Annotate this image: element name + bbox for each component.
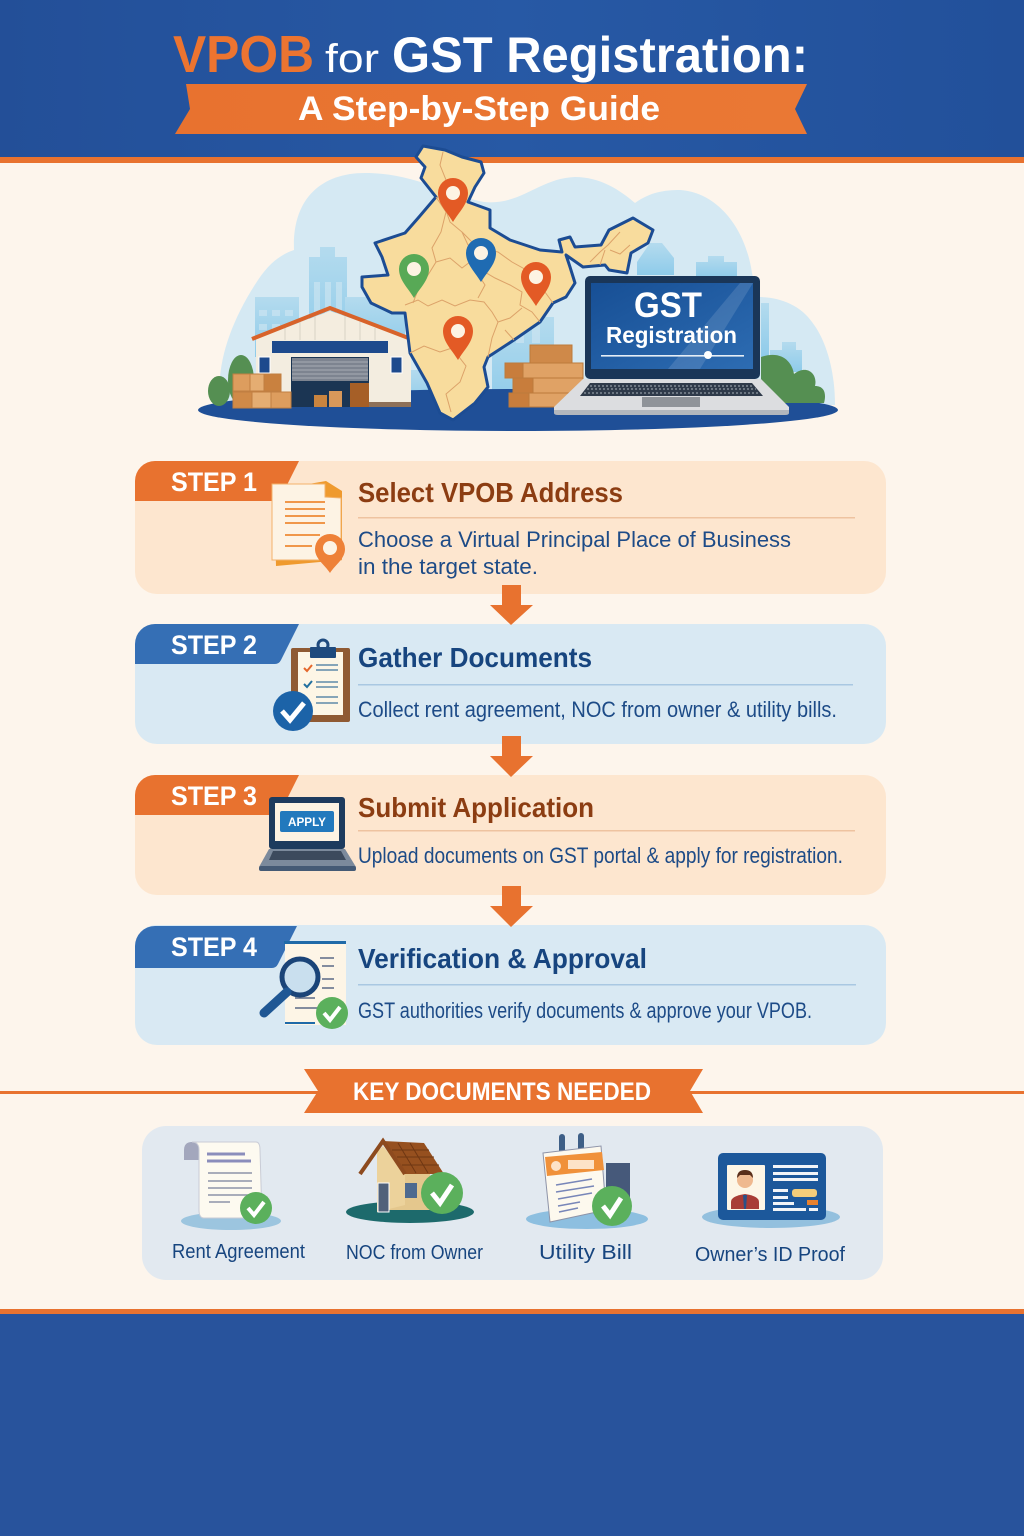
bushes — [208, 355, 825, 406]
step 1 card: Select VPOB Address — [358, 477, 623, 508]
step 2 card — [135, 624, 886, 744]
key documents banner: KEY DOCUMENTS NEEDED — [353, 1078, 651, 1106]
arrow: step 1 to 2 — [490, 585, 533, 625]
arrow: step 2 to 3 — [490, 736, 533, 777]
city skyline — [255, 243, 802, 407]
step 3 card: Upload documents on GST portal & apply for registration. — [358, 843, 843, 868]
title — [173, 26, 808, 84]
subtitle ribbon — [175, 84, 807, 134]
boxes left — [233, 374, 291, 408]
step 4 tab — [135, 926, 297, 968]
step 1 tab — [135, 461, 299, 501]
title: GST Registration: — [392, 27, 808, 83]
document: NOC from owner — [346, 1141, 483, 1264]
hero illustration — [198, 146, 838, 431]
step 1 description: in the target state. — [358, 554, 538, 579]
icon: laptop with apply button: APPLY — [288, 815, 326, 829]
India map — [362, 146, 653, 420]
step 4 tab: STEP 4 — [171, 932, 257, 962]
key documents banner — [304, 1069, 703, 1113]
title: for — [325, 37, 379, 81]
document: utility bill: Utility Bill — [539, 1242, 632, 1264]
step 3 card — [135, 775, 886, 895]
step 3 card: Submit Application — [358, 792, 594, 823]
step 4 card: Verification & Approval — [358, 943, 647, 974]
icon: clipboard with check — [273, 640, 350, 731]
cloud backdrop — [220, 173, 835, 405]
ground ellipse — [198, 389, 838, 431]
laptop — [554, 276, 789, 415]
boxes right — [505, 345, 583, 407]
arrow: step 3 to 4 — [490, 886, 533, 927]
step 1 description: Choose a Virtual Principal Place of Business — [358, 527, 791, 552]
step 2 tab: STEP 2 — [171, 630, 257, 660]
laptop: GST — [634, 286, 702, 325]
step 4 card — [135, 925, 886, 1045]
icon: document with pin — [272, 481, 345, 573]
title: VPOB — [173, 26, 314, 84]
warehouse — [252, 308, 411, 407]
document: NOC from owner: NOC from Owner — [346, 1242, 483, 1264]
icon: laptop with apply button — [259, 797, 356, 871]
step 4 card: GST authorities verify documents & approve your VPOB. — [358, 998, 812, 1023]
step 2 card: Gather Documents — [358, 642, 592, 673]
laptop: Registration — [606, 322, 737, 348]
step 3 tab — [135, 775, 299, 815]
map pins — [399, 178, 551, 360]
step 1 tab: STEP 1 — [171, 467, 257, 497]
subtitle ribbon: A Step-by-Step Guide — [298, 90, 660, 128]
skyline windows — [259, 282, 540, 343]
document: owner's ID proof — [695, 1153, 845, 1266]
document: utility bill — [526, 1133, 648, 1264]
document: rent agreement — [172, 1142, 305, 1263]
footer band — [0, 1309, 1024, 1536]
step 2 tab — [135, 624, 299, 664]
step 1 card — [135, 461, 886, 594]
step 2 card: Collect rent agreement, NOC from owner & utility bills. — [358, 697, 837, 722]
document: owner's ID proof: Owner’s ID Proof — [695, 1244, 845, 1266]
document: rent agreement: Rent Agreement — [172, 1241, 305, 1263]
step 1 description — [358, 527, 791, 579]
icon: magnifier over document — [264, 941, 348, 1029]
step 3 tab: STEP 3 — [171, 781, 257, 811]
documents panel — [142, 1126, 883, 1280]
header band — [0, 0, 1024, 163]
